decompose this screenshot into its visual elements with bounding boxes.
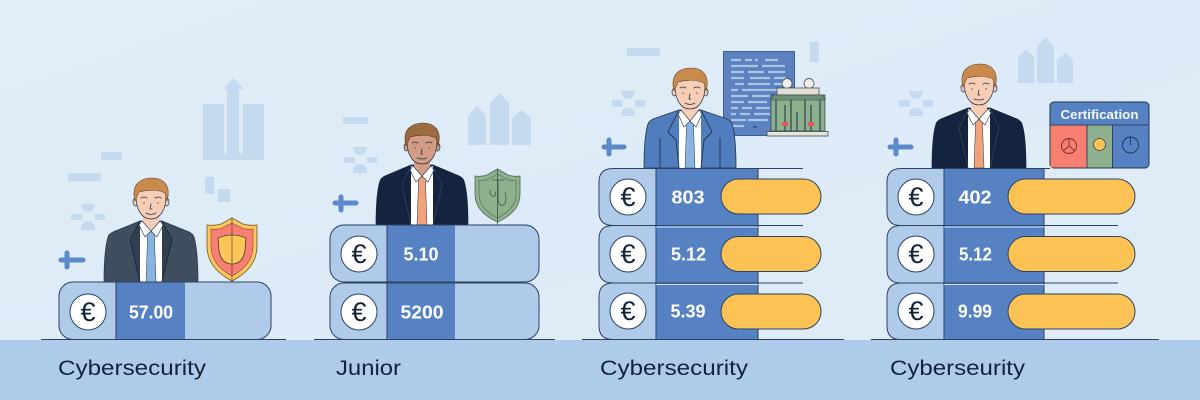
background city chart	[1018, 37, 1073, 83]
label: Cyberseurity	[890, 357, 1026, 380]
icon: plus	[890, 140, 911, 154]
ground line	[871, 338, 1159, 340]
bar: euro value row	[59, 282, 271, 340]
yellow pill	[1008, 294, 1135, 329]
icon: euro coin	[610, 179, 646, 215]
value: 5.12	[959, 244, 992, 264]
ground line	[582, 338, 844, 340]
icon: yellow dot	[1094, 138, 1106, 150]
euro symbol: €	[351, 239, 367, 269]
value: 5.39	[670, 302, 706, 322]
euro symbol: €	[620, 182, 636, 212]
panel: column 2	[314, 93, 555, 380]
icon: document	[724, 52, 794, 136]
label: Cybersecurity	[600, 357, 749, 380]
yellow pill	[721, 294, 821, 329]
person: navy suit	[376, 123, 468, 225]
value: 803	[672, 188, 704, 208]
person: navy suit	[932, 64, 1026, 168]
icon: euro coin	[898, 179, 934, 215]
label: Junior	[336, 357, 401, 380]
icon: plus	[61, 253, 83, 267]
icon: euro coin	[898, 236, 934, 272]
person: dark grey suit	[104, 178, 198, 282]
panel: column 1	[41, 78, 286, 380]
yellow pill	[1008, 179, 1135, 214]
icon: green shield	[475, 169, 520, 225]
icon: building	[767, 78, 828, 136]
yellow pill	[721, 179, 821, 214]
panel: column 3	[582, 42, 844, 380]
icon: gamepad shape	[612, 91, 645, 116]
euro symbol: €	[908, 296, 924, 326]
decorative dash	[343, 117, 368, 124]
yellow pill	[721, 236, 821, 272]
floor band	[0, 340, 1200, 400]
panel: column 4	[871, 37, 1159, 380]
euro symbol: €	[908, 182, 924, 212]
certification card	[1050, 102, 1149, 168]
icon: blue dial	[1123, 137, 1139, 153]
value: 57.00	[129, 302, 173, 322]
background city chart	[468, 93, 531, 145]
value: 5200	[400, 302, 444, 322]
decorative dashes	[68, 152, 230, 202]
euro symbol: €	[620, 296, 636, 326]
icon: shield	[207, 218, 257, 281]
value: 5.12	[671, 244, 706, 264]
ground line	[41, 338, 286, 340]
bar: euro value rows	[330, 225, 539, 340]
value: 5.10	[404, 244, 438, 264]
icon: euro coin	[898, 293, 934, 329]
icon: plus	[604, 140, 624, 154]
icon: gamepad shape	[71, 204, 105, 230]
bar: euro value rows	[887, 168, 1135, 340]
icon: euro coin	[341, 236, 377, 272]
euro symbol: €	[908, 239, 924, 269]
card title: Certification	[1060, 108, 1138, 122]
icon: euro coin	[610, 293, 646, 329]
background bar chart with arrow	[203, 78, 264, 160]
euro symbol: €	[80, 297, 96, 327]
bar: euro value rows	[599, 168, 821, 340]
euro symbol: €	[620, 239, 636, 269]
decorative dashes	[627, 42, 819, 62]
icon: euro coin	[341, 294, 377, 330]
icon: gamepad shape	[899, 91, 933, 116]
person: blue suit	[644, 68, 736, 168]
label: Cybersecurity	[58, 357, 207, 380]
icon: red dial	[1062, 138, 1077, 154]
icon: plus	[335, 197, 356, 210]
ground line	[314, 338, 555, 340]
icon: euro coin	[70, 294, 106, 330]
yellow pill	[1008, 236, 1135, 272]
euro symbol: €	[351, 297, 367, 327]
value: 9.99	[958, 302, 992, 322]
icon: euro coin	[610, 236, 646, 272]
icon: gamepad shape	[344, 147, 377, 173]
value: 402	[958, 188, 992, 208]
